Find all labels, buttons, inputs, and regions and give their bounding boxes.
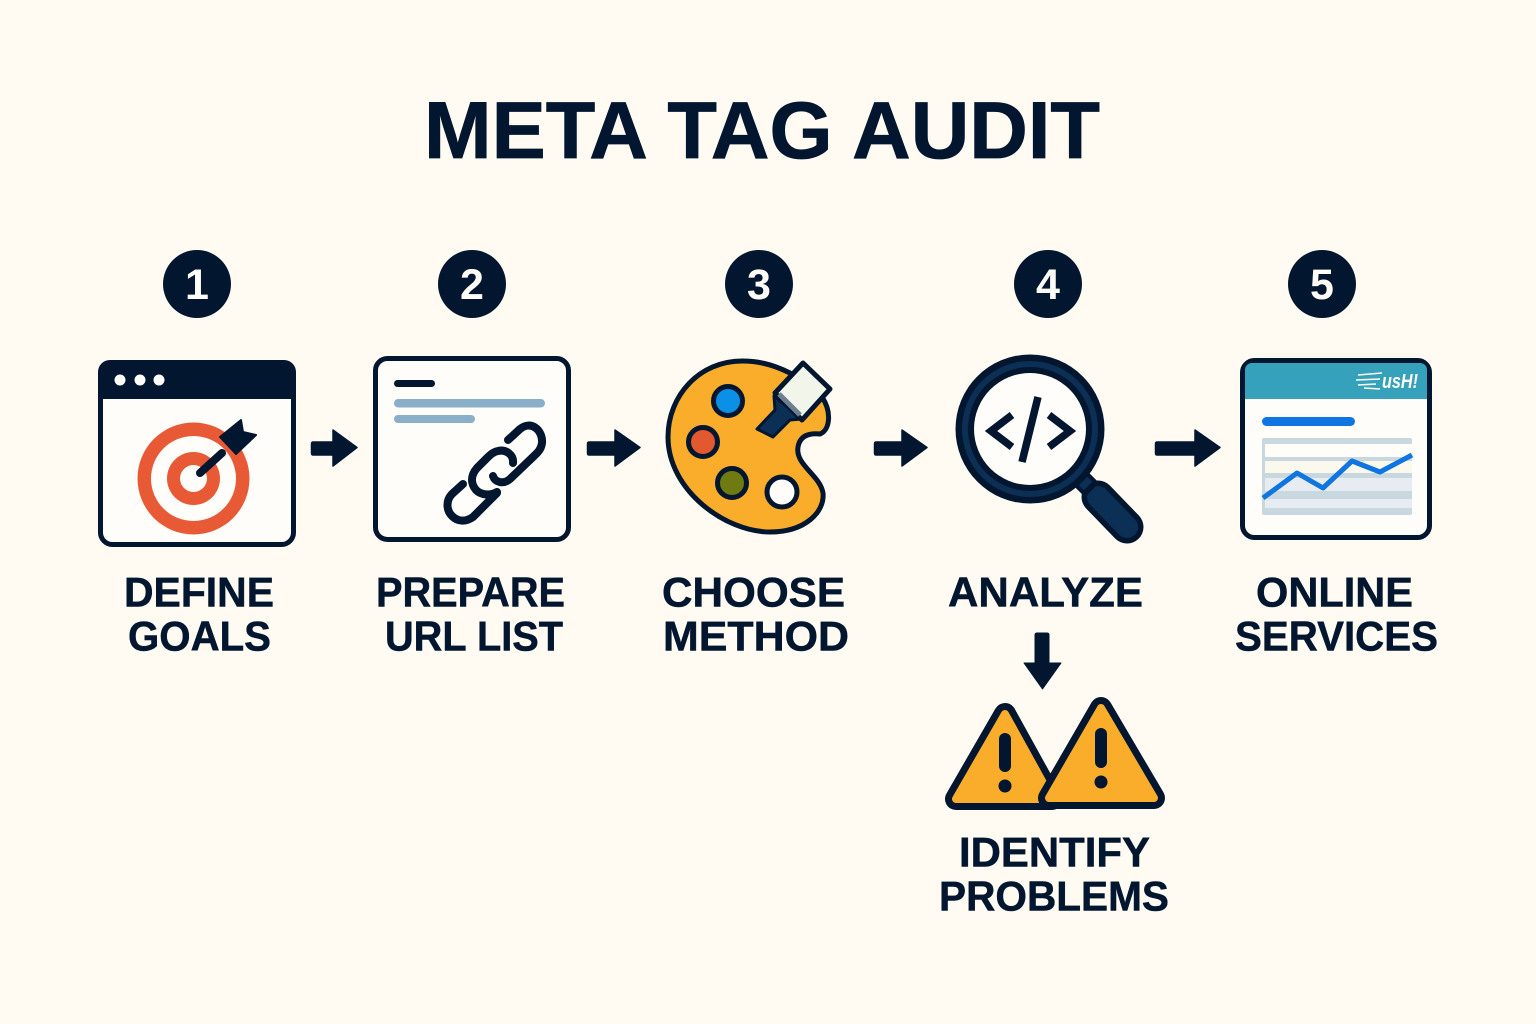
label: choose method: CHOOSE <box>662 568 845 616</box>
arrow: step 4 to step 5 <box>1156 430 1220 466</box>
label: choose method: METHOD <box>663 612 849 660</box>
step 1 number badge: 1 <box>185 261 209 309</box>
icon: magnifier with code symbol <box>956 354 1127 527</box>
icon: browser window with target <box>98 360 296 544</box>
step 3 number badge: 3 <box>747 261 771 309</box>
step 3 number badge <box>725 250 793 318</box>
step 5 number badge: 5 <box>1310 261 1334 309</box>
label: identify problems: IDENTIFY <box>959 828 1150 876</box>
icon: paint palette with brush <box>668 361 830 532</box>
label: online services: SERVICES <box>1235 612 1438 660</box>
label: define goals: DEFINE <box>124 568 274 616</box>
label: identify problems <box>939 828 1169 920</box>
icon: online service dashboard window: usH! <box>1382 371 1418 393</box>
label: prepare url list: URL LIST <box>385 612 563 660</box>
label: define goals <box>124 568 274 660</box>
label: define goals: GOALS <box>128 612 271 660</box>
label: online services: ONLINE <box>1256 568 1413 616</box>
label: online services <box>1235 568 1438 660</box>
label: analyze: ANALYZE <box>948 568 1143 616</box>
icon: page with link chain <box>376 358 568 540</box>
step 2 number badge <box>438 250 506 318</box>
arrow: step 1 to step 2 <box>312 430 357 466</box>
step 4 number badge <box>1014 250 1082 318</box>
label: prepare url list: PREPARE <box>376 568 565 616</box>
icon: online service dashboard window <box>1242 360 1430 538</box>
title: META TAG AUDIT <box>424 86 1100 176</box>
step 4 number badge: 4 <box>1036 261 1060 309</box>
arrow: step 2 to step 3 <box>588 430 640 466</box>
icon: warning triangles <box>956 708 1154 799</box>
label: choose method <box>662 568 849 660</box>
arrow: step 3 to step 4 <box>874 430 927 466</box>
step 2 number badge: 2 <box>460 261 484 309</box>
step 5 number badge <box>1288 250 1356 318</box>
arrow: analyze down to identify problems <box>1024 633 1061 689</box>
step 1 number badge <box>163 250 231 318</box>
label: identify problems: PROBLEMS <box>939 872 1169 920</box>
label: prepare url list <box>376 568 565 660</box>
